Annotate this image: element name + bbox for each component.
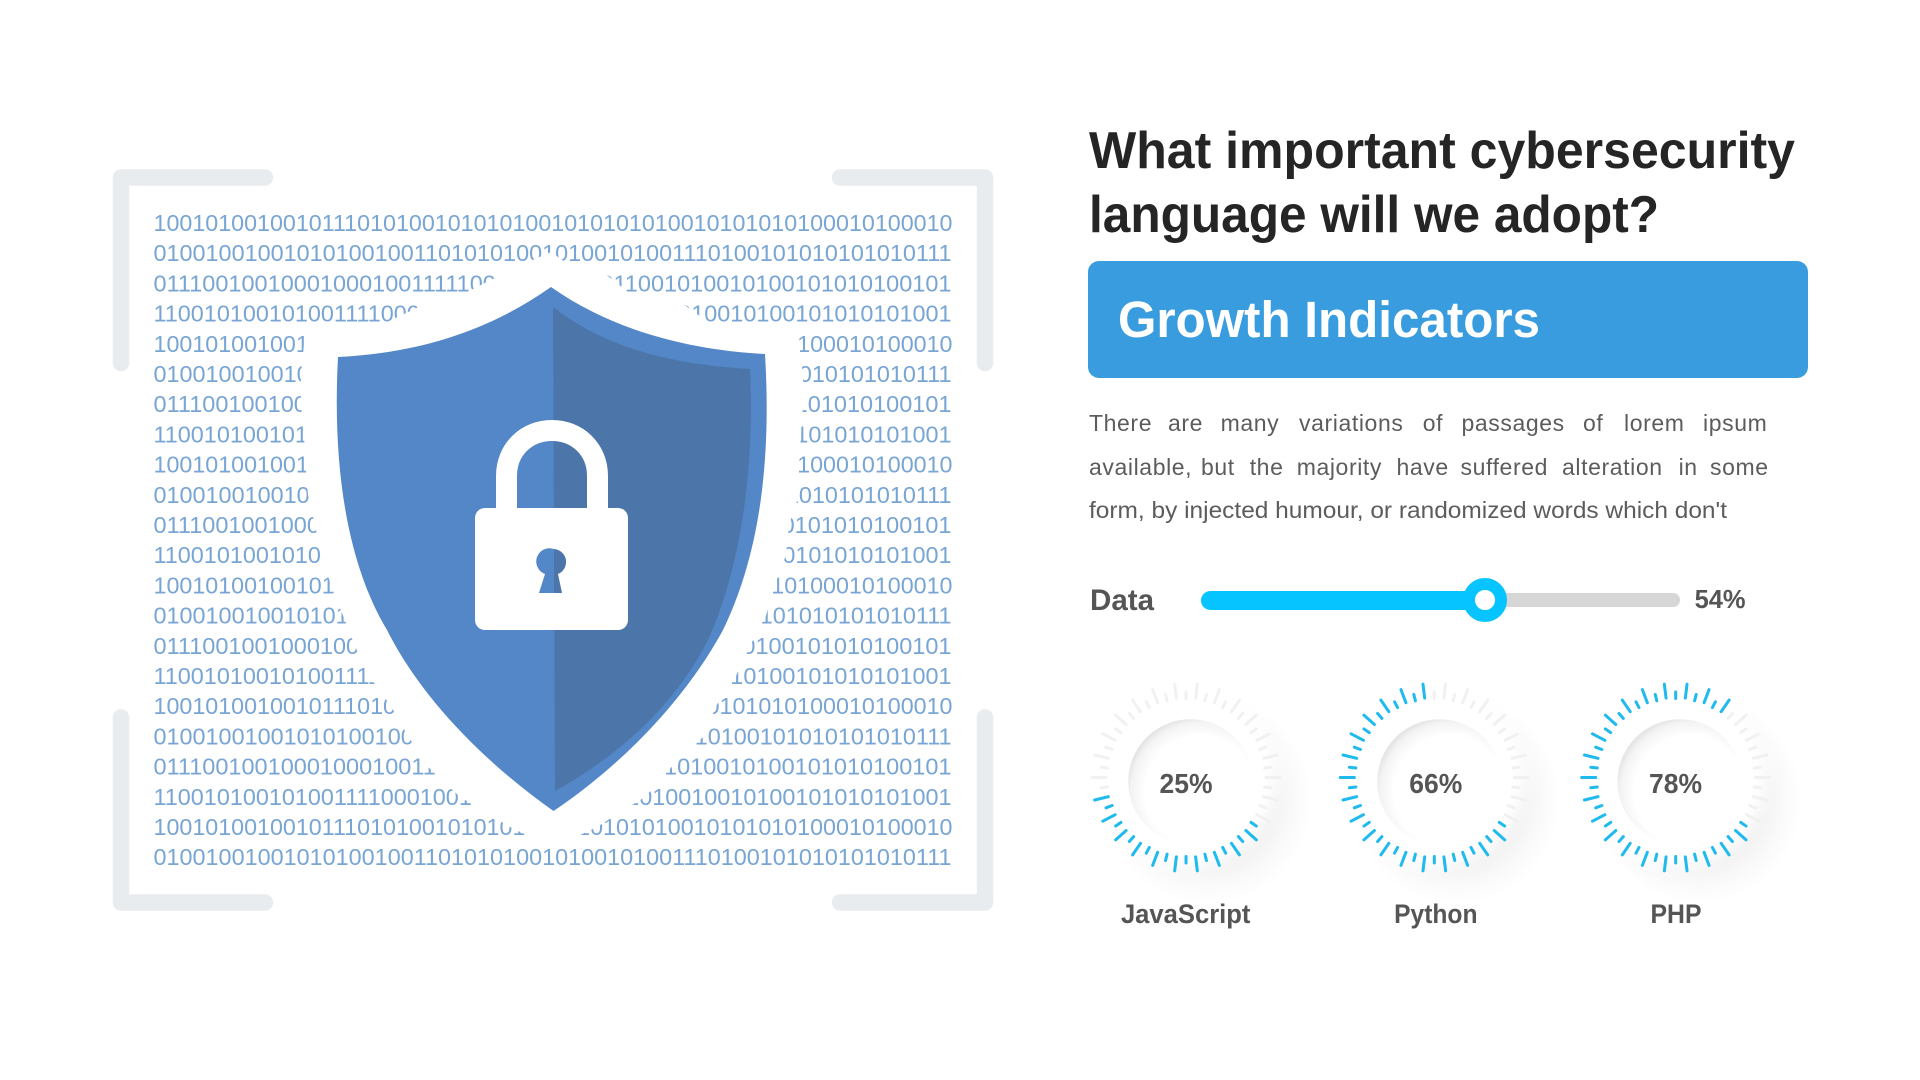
binary code background: 10010100100101110101001010101001010101010010101010100010100010: [154, 331, 952, 357]
binary code background: 11001010010100111100010010101010101011010010010100101010101001: [154, 542, 952, 568]
binary code background: 10010100100101110101001010101001010101010010101010100010100010: [154, 452, 952, 478]
binary code background: 10010100100101110101001010101001010101010010101010100010100010: [154, 210, 952, 236]
text block: description: lorem: [1624, 410, 1685, 436]
binary code background: 11001010010100111100010010101010101011010010010100101010101001: [154, 663, 952, 689]
padlock body: [475, 508, 628, 630]
binary code background: 10010100100101110101001010101001010101010010101010100010100010: [154, 693, 952, 719]
binary code background: 10010100100101110101001010101001010101010010101010100010100010: [154, 814, 952, 840]
binary code background: 01001001001010100100110101010010100101001110100101010101010111: [154, 844, 952, 870]
text block: description: suffered: [1460, 454, 1548, 480]
title: What important cybersecurity: [1089, 122, 1795, 180]
shield body: [337, 287, 767, 811]
text block: description: of: [1423, 410, 1443, 436]
gauge: Python 66%: Python: [1394, 899, 1478, 929]
text block: description: There: [1089, 410, 1152, 436]
binary code background: 11001010010100111100010010101010101011010010010100101010101001: [154, 301, 952, 327]
text block: description: available,: [1089, 454, 1192, 480]
binary code background: 01110010010001000100111110010101001011001010010100101010100101: [154, 633, 952, 659]
slider fill: [1201, 591, 1485, 610]
text block: description: alteration: [1562, 454, 1663, 480]
gauge: Python 66%: 66%: [1409, 768, 1462, 799]
gauge: JavaScript 25%: JavaScript: [1121, 899, 1250, 929]
padlock shackle: [506, 430, 598, 512]
binary code background: 11001010010100111100010010101010101011010010010100101010101001: [154, 784, 952, 810]
banner: growth indicators: [1088, 261, 1808, 378]
text block: description: ipsum: [1703, 410, 1767, 436]
slider thumb: [1469, 584, 1501, 616]
text block: description: but: [1201, 454, 1235, 480]
slider: data 54%: [1090, 584, 1746, 617]
panel: scanner frame corners: [121, 178, 985, 902]
gauge: Python 66%: [1340, 684, 1561, 929]
gauge: PHP 78%: PHP: [1650, 899, 1702, 929]
padlock keyhole: [536, 548, 566, 593]
text block: description: are: [1168, 410, 1203, 436]
slider track: [1201, 593, 1680, 607]
text block: description: the: [1250, 454, 1283, 480]
text block: description: in: [1679, 454, 1698, 480]
binary code background: 01001001001010100100110101010010100101001110100101010101010111: [154, 482, 952, 508]
slider value: 54%: [1695, 584, 1746, 614]
text block: description: variations: [1299, 410, 1403, 436]
binary code background: 10010100100101110101001010101001010101010010101010100010100010: [154, 572, 952, 598]
text block: description: majority: [1297, 454, 1382, 480]
icon: shield with padlock: [337, 287, 767, 811]
binary code background: 01001001001010100100110101010010100101001110100101010101010111: [154, 361, 952, 387]
title: language will we adopt?: [1089, 186, 1659, 244]
gauge: PHP 78%: [1582, 684, 1803, 929]
text block: description: form, by injected humour, or randomized words which don't: [1089, 497, 1728, 523]
binary code background: 01001001001010100100110101010010100101001110100101010101010111: [154, 723, 952, 749]
binary code background: 01110010010001000100111110010101001011001010010100101010100101: [154, 512, 952, 538]
text block: description: some: [1710, 454, 1769, 480]
text block: description: have: [1396, 454, 1449, 480]
shield dark half: [553, 307, 751, 791]
binary code background: 01001001001010100100110101010010100101001110100101010101010111: [154, 603, 952, 629]
slider label: Data: [1090, 584, 1154, 617]
binary code background: 01001001001010100100110101010010100101001110100101010101010111: [154, 240, 952, 266]
gauge: JavaScript 25%: [1092, 684, 1313, 929]
text block: description: many: [1221, 410, 1279, 436]
text block: description: passages: [1462, 410, 1565, 436]
binary code background: 01110010010001000100111110010101001011001010010100101010100101: [154, 270, 952, 296]
banner: growth indicators: Growth Indicators: [1118, 291, 1540, 348]
binary code background: [154, 210, 952, 870]
binary code background: 01110010010001000100111110010101001011001010010100101010100101: [154, 754, 952, 780]
text block: description: of: [1583, 410, 1603, 436]
gauge: PHP 78%: 78%: [1649, 768, 1702, 799]
text block: description: [1089, 410, 1769, 523]
binary code background: 01110010010001000100111110010101001011001010010100101010100101: [154, 391, 952, 417]
shield white halo: [301, 252, 803, 848]
title: [1089, 122, 1795, 244]
binary code background: 11001010010100111100010010101010101011010010010100101010101001: [154, 421, 952, 447]
gauge: JavaScript 25%: 25%: [1160, 768, 1213, 799]
